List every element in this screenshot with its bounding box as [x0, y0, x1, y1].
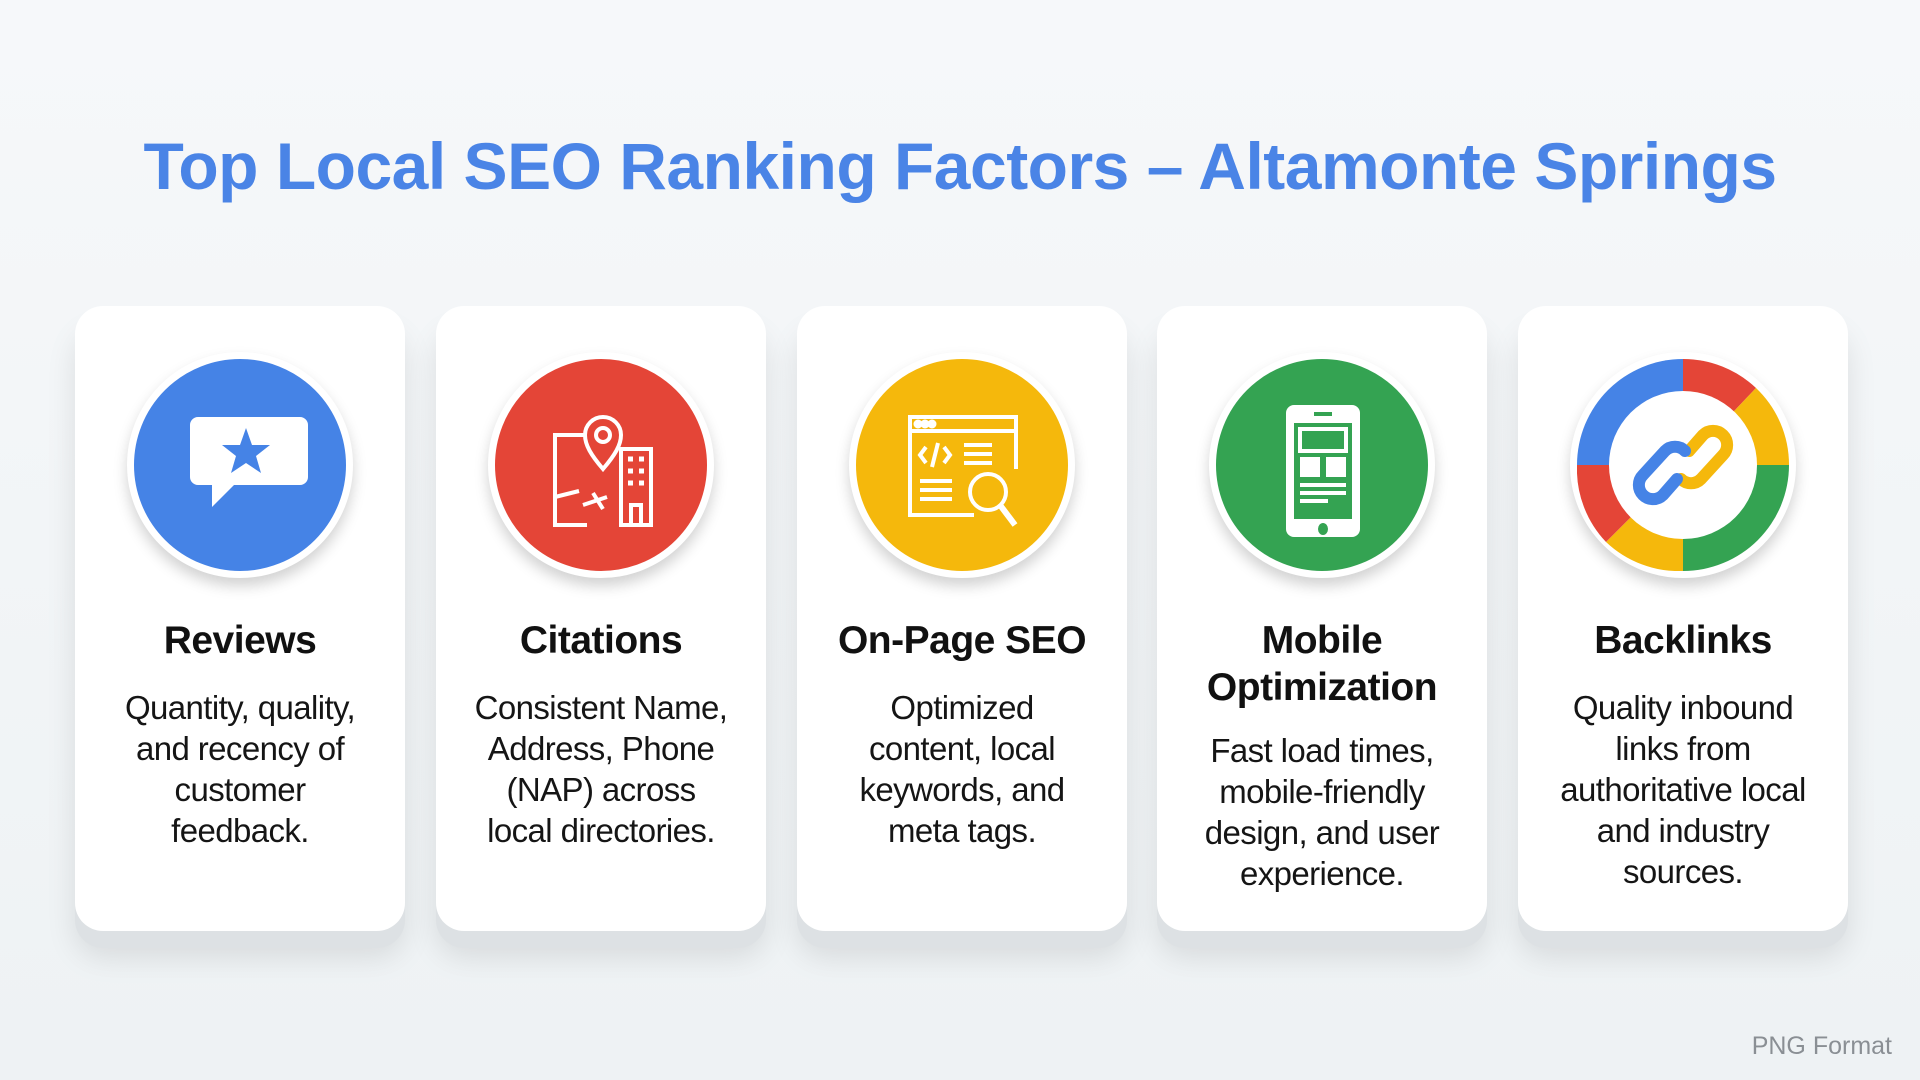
panel: mobile optimization	[1157, 306, 1487, 931]
text: keywords, and	[860, 771, 1064, 808]
text: meta tags.	[888, 812, 1036, 849]
heading: Optimization	[1207, 666, 1437, 709]
heading: Backlinks	[1594, 619, 1772, 662]
text: design, and user	[1205, 814, 1439, 851]
text	[1205, 732, 1440, 892]
text: and recency of	[136, 730, 344, 767]
panel: citations	[436, 306, 766, 931]
icon: smartphone	[1209, 352, 1435, 578]
text: Address, Phone	[488, 730, 714, 767]
title: Top Local SEO Ranking Factors – Altamonte Springs	[143, 129, 1777, 203]
icon: map pin building	[488, 352, 714, 578]
text: feedback.	[171, 812, 309, 849]
text	[125, 689, 355, 849]
text: authoritative local	[1560, 771, 1806, 808]
text: and industry	[1597, 812, 1769, 849]
text: customer	[175, 771, 305, 808]
text	[1560, 689, 1806, 890]
text: experience.	[1240, 855, 1404, 892]
heading	[1207, 619, 1437, 709]
icon: review bubble star	[127, 352, 353, 578]
text: Quality inbound	[1573, 689, 1793, 726]
panel: backlinks	[1518, 306, 1848, 931]
text	[475, 689, 727, 849]
heading: On-Page SEO	[838, 619, 1086, 662]
text: content, local	[869, 730, 1055, 767]
heading: Citations	[520, 619, 682, 662]
heading: Reviews	[164, 619, 316, 662]
text: Consistent Name,	[475, 689, 727, 726]
text: links from	[1615, 730, 1751, 767]
text	[860, 689, 1064, 849]
footer label: PNG Format	[1752, 1032, 1892, 1060]
panel: on-page seo	[797, 306, 1127, 931]
text: local directories.	[487, 812, 715, 849]
text: mobile-friendly	[1219, 773, 1425, 810]
text: Fast load times,	[1210, 732, 1434, 769]
text: (NAP) across	[506, 771, 696, 808]
icon: chain link ring	[1570, 352, 1796, 578]
panel: reviews	[75, 306, 405, 931]
text: Quantity, quality,	[125, 689, 355, 726]
icon: code window magnifier	[849, 352, 1075, 578]
heading: Mobile	[1262, 619, 1382, 662]
text: sources.	[1623, 853, 1743, 890]
text: Optimized	[890, 689, 1034, 726]
